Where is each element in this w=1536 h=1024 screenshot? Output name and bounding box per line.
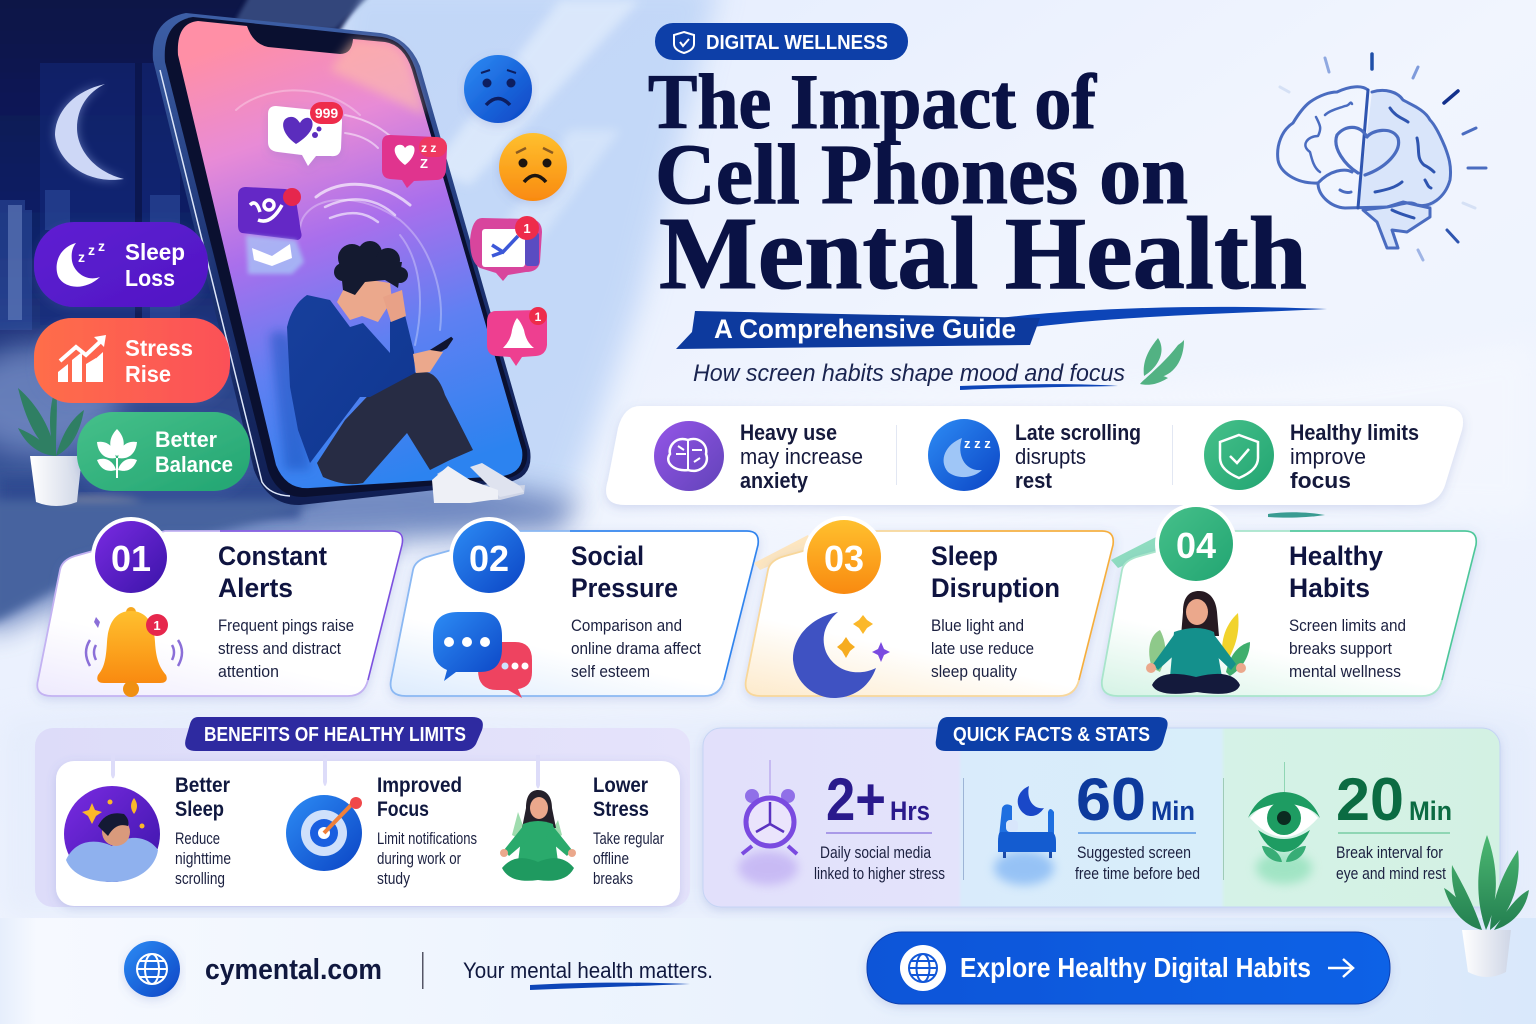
benefit: better sleep bbox=[64, 774, 231, 888]
panel: quick facts bbox=[703, 717, 1500, 907]
benefit: better sleep: Reduce bbox=[175, 830, 220, 848]
icon: brain line art bbox=[1278, 54, 1486, 260]
benefit: lower stress: Lower bbox=[593, 774, 648, 797]
card 03: sleep disruption: Sleep bbox=[931, 541, 998, 571]
benefit: improved focus: Limit notifications bbox=[377, 830, 477, 848]
stat: 2+ hrs: linked to higher stress bbox=[814, 865, 945, 883]
benefit: better sleep: nighttime bbox=[175, 850, 231, 868]
badge: sleep loss: z bbox=[78, 249, 85, 265]
point: focus: focus bbox=[1290, 468, 1351, 493]
card 04: healthy habits: Screen limits and bbox=[1289, 617, 1406, 635]
icon: meditating woman bbox=[1146, 591, 1250, 694]
stat: 60 min: Suggested screen bbox=[1077, 844, 1191, 862]
badge: sleep loss bbox=[34, 222, 208, 307]
card 04: healthy habits: 04 bbox=[1176, 525, 1216, 566]
badge: stress rise bbox=[34, 318, 230, 403]
tag: digital wellness: DIGITAL WELLNESS bbox=[706, 32, 888, 54]
card 01: constant alerts: Alerts bbox=[218, 573, 293, 603]
tagline bbox=[693, 338, 1184, 390]
card 02: social pressure: online drama affect bbox=[571, 640, 701, 658]
card 04: healthy habits: Healthy bbox=[1289, 541, 1383, 571]
stat: 2+ hrs: Hrs bbox=[890, 796, 930, 826]
card 02: social pressure: 02 bbox=[469, 538, 509, 579]
icon: leaf bbox=[1140, 338, 1184, 385]
button: explore: Explore Healthy Digital Habits bbox=[960, 952, 1311, 983]
card 02: social pressure: Social bbox=[571, 541, 644, 571]
badge: sleep loss: z bbox=[98, 238, 105, 254]
icon: potted plant right bbox=[1444, 835, 1529, 977]
stat: 60 min bbox=[994, 766, 1200, 885]
head bbox=[337, 277, 392, 322]
smartphone and hand bbox=[431, 338, 452, 353]
point: focus: Healthy limits bbox=[1290, 420, 1419, 445]
point: rest: z z z bbox=[964, 436, 991, 451]
card 01: constant alerts: Constant bbox=[218, 541, 327, 571]
icon: moon and stars bbox=[793, 612, 890, 698]
point: focus: improve bbox=[1290, 444, 1366, 469]
icon: heart chat bubble bbox=[268, 102, 343, 166]
panel: benefits bbox=[35, 717, 690, 907]
shoes bbox=[437, 468, 525, 500]
benefit: improved focus: Improved bbox=[377, 774, 462, 797]
card 02: social pressure: Pressure bbox=[571, 573, 678, 603]
brush underline bbox=[1000, 307, 1327, 330]
hair bbox=[334, 241, 408, 295]
benefit: improved focus: study bbox=[377, 870, 411, 888]
footer band bbox=[0, 918, 1536, 1024]
icon: mail notification bbox=[470, 216, 542, 281]
icon: bell: 1 bbox=[153, 618, 161, 633]
stat: 20 min: Min bbox=[1409, 796, 1452, 826]
badge: better balance: Better bbox=[155, 427, 217, 452]
arm to head bbox=[383, 290, 406, 322]
tag: digital wellness bbox=[655, 23, 908, 60]
label: benefits heading: BENEFITS OF HEALTHY LIMITS bbox=[204, 724, 466, 746]
title: Cell Phones on bbox=[655, 126, 1188, 222]
label: quick facts heading: QUICK FACTS & STATS bbox=[953, 724, 1150, 746]
icon: pink heart bubble: Z bbox=[420, 156, 428, 171]
card 02: social pressure: self esteem bbox=[571, 663, 650, 681]
stat: 2+ hrs: 2+ bbox=[826, 766, 886, 833]
label: benefits heading bbox=[185, 717, 483, 751]
badge: sleep loss: z bbox=[88, 242, 95, 258]
point: rest bbox=[928, 419, 1141, 493]
label: quick facts heading bbox=[936, 717, 1168, 751]
benefit: lower stress bbox=[500, 774, 664, 888]
legs bbox=[317, 372, 473, 484]
benefit: better sleep: scrolling bbox=[175, 870, 225, 888]
badge: stress rise: Rise bbox=[125, 361, 171, 387]
benefit: lower stress: Take regular bbox=[593, 830, 664, 848]
benefit: lower stress: Stress bbox=[593, 798, 649, 821]
icon: sad blue emoji bbox=[464, 55, 532, 123]
point: anxiety bbox=[654, 420, 863, 493]
icon: bell notification: 1 bbox=[535, 310, 542, 324]
card 03: sleep disruption: Disruption bbox=[931, 573, 1060, 603]
phone bbox=[153, 13, 531, 505]
button: explore bbox=[867, 932, 1390, 1004]
icon: crescent moon bbox=[55, 84, 124, 180]
point: anxiety: may increase bbox=[740, 444, 863, 469]
benefit: improved focus: during work or bbox=[377, 850, 461, 868]
badge: stress rise: Stress bbox=[125, 335, 193, 361]
icon: mail notification: 1 bbox=[523, 221, 531, 236]
badge: sleep loss: Sleep bbox=[125, 239, 185, 265]
icon: bell bbox=[86, 607, 182, 697]
icon: purple social stack bbox=[238, 187, 304, 274]
stat: 2+ hrs: Daily social media bbox=[820, 844, 932, 862]
card 01: constant alerts: 01 bbox=[111, 538, 151, 579]
card 02: social pressure bbox=[391, 517, 758, 698]
card 03: sleep disruption bbox=[746, 516, 1113, 698]
website: cymental.com bbox=[205, 954, 382, 986]
point: rest: rest bbox=[1015, 468, 1053, 493]
slogan bbox=[422, 952, 713, 990]
point: anxiety: anxiety bbox=[740, 468, 809, 493]
hoodie bbox=[287, 295, 415, 463]
card 01: constant alerts: attention bbox=[218, 663, 279, 681]
icon: chat bubbles bbox=[433, 612, 532, 698]
benefit: lower stress: offline bbox=[593, 850, 629, 868]
icon: pink heart bubble bbox=[382, 135, 447, 188]
panel: key points bbox=[606, 406, 1463, 505]
icon: sad orange emoji bbox=[499, 133, 567, 201]
badge: better balance bbox=[77, 412, 250, 491]
stat: 60 min: free time before bed bbox=[1075, 865, 1200, 883]
stat: 2+ hrs bbox=[738, 760, 945, 885]
card 04: healthy habits bbox=[1102, 503, 1476, 696]
icon: globe bbox=[124, 941, 180, 997]
card 01: constant alerts bbox=[37, 517, 403, 697]
card 03: sleep disruption: 03 bbox=[824, 538, 864, 579]
icon: potted plant left bbox=[18, 385, 84, 506]
benefit: better sleep: Sleep bbox=[175, 798, 224, 821]
card 03: sleep disruption: Blue light and bbox=[931, 617, 1024, 635]
card 04: healthy habits: Habits bbox=[1289, 573, 1370, 603]
icon: bell notification bbox=[487, 307, 547, 366]
point: focus bbox=[1204, 420, 1419, 493]
benefit: lower stress: breaks bbox=[593, 870, 633, 888]
benefit: improved focus bbox=[286, 774, 477, 888]
stat: 60 min: 60 bbox=[1076, 766, 1146, 833]
benefit: better sleep: Better bbox=[175, 774, 230, 797]
card 04: healthy habits: mental wellness bbox=[1289, 663, 1401, 681]
card 02: social pressure: Comparison and bbox=[571, 617, 682, 635]
icon: pink heart bubble: z z bbox=[421, 141, 436, 155]
stat: 20 min: Break interval for bbox=[1336, 844, 1443, 862]
card 03: sleep disruption: late use reduce bbox=[931, 640, 1034, 658]
stat: 20 min: eye and mind rest bbox=[1336, 865, 1446, 883]
icon: heart chat bubble: 999 bbox=[315, 105, 338, 121]
point: rest: Late scrolling bbox=[1015, 420, 1141, 445]
subtitle banner: A Comprehensive Guide bbox=[714, 314, 1016, 344]
card 01: constant alerts: Frequent pings raise bbox=[218, 617, 354, 635]
subtitle banner bbox=[676, 311, 1040, 349]
benefit: improved focus: Focus bbox=[377, 798, 429, 821]
card 03: sleep disruption: sleep quality bbox=[931, 663, 1018, 681]
badge: better balance: Balance bbox=[155, 452, 233, 477]
tagline: How screen habits shape mood and focus bbox=[693, 360, 1125, 387]
stat: 20 min bbox=[1248, 762, 1452, 884]
point: rest: disrupts bbox=[1015, 444, 1086, 469]
title bbox=[648, 58, 1307, 311]
point: anxiety: Heavy use bbox=[740, 420, 837, 445]
night window bbox=[40, 63, 180, 325]
title: The Impact of bbox=[648, 58, 1097, 145]
illustration: sitting person bbox=[270, 241, 525, 503]
stat: 20 min: 20 bbox=[1336, 766, 1404, 833]
stat: 60 min: Min bbox=[1151, 796, 1195, 826]
card 01: constant alerts: stress and distract bbox=[218, 640, 341, 658]
title: Mental Health bbox=[659, 196, 1307, 311]
slogan: Your mental health matters. bbox=[463, 958, 713, 983]
card 04: healthy habits: breaks support bbox=[1289, 640, 1392, 658]
badge: sleep loss: Loss bbox=[125, 265, 175, 291]
